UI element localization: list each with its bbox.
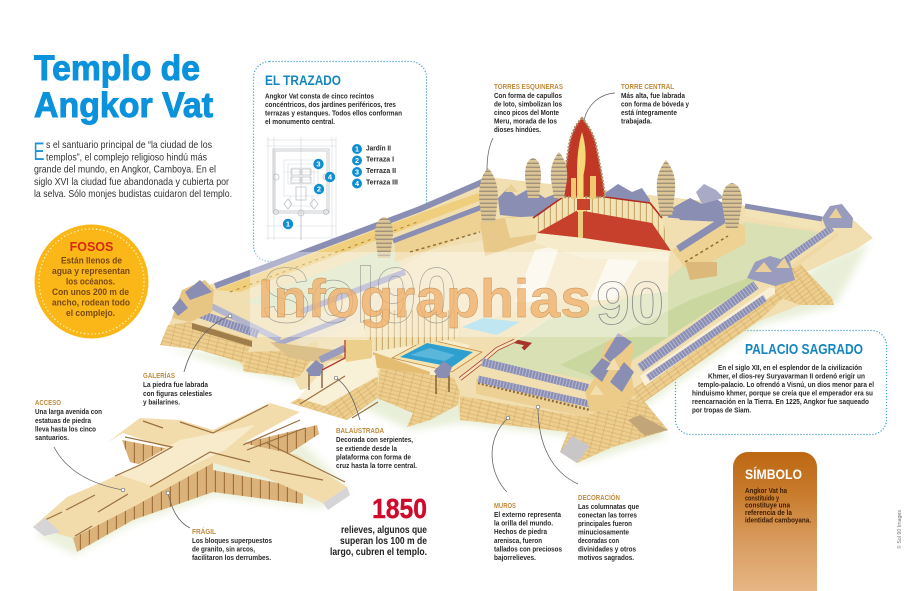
annotation: decoración: decoradas con — [578, 536, 619, 545]
icon: plan marker 3: 3 — [316, 160, 321, 169]
legend: plan keys: 4 — [355, 179, 359, 188]
stat: 1850 relieves — [330, 493, 427, 558]
text: palacio description: hinduismo khmer, porque se creía que el emperador era su — [692, 388, 873, 398]
drop cap: E — [34, 138, 44, 166]
text: fosos description: ancho, rodean todo — [52, 298, 131, 308]
text: palacio description: En el siglo XII, en el esplendor de la civilización — [718, 363, 862, 372]
title — [34, 48, 213, 125]
white stair flanks — [515, 245, 640, 302]
icon: plan marker 1: 1 — [286, 220, 290, 229]
stat: 1850 relieves: largo, cubren el templo. — [330, 547, 427, 558]
causeway balustrade — [300, 376, 378, 418]
heading: palacio sagrado: PALACIO SAGRADO — [745, 341, 863, 358]
front right gallery — [476, 362, 590, 418]
callout: fosos — [34, 224, 148, 338]
annotation: acceso: estatuas de piedra — [35, 416, 92, 425]
annotation: galerías — [143, 314, 232, 406]
right gate pavilion — [747, 256, 795, 286]
text: fosos description: Con unos 200 m de — [52, 287, 129, 297]
cross walls — [73, 505, 133, 552]
annotation: torres esquineras: cinco picos del Monte — [494, 108, 559, 117]
stat: 1850 relieves: superan los 100 m de — [340, 536, 427, 547]
front right corner pavilion — [585, 333, 635, 412]
roof clusters behind the central tower — [498, 180, 730, 238]
corner tower — [479, 168, 498, 222]
legend: plan keys: 2 — [355, 156, 359, 165]
central tower cluster left 1 — [525, 158, 541, 198]
annotation: torres esquineras — [487, 84, 563, 170]
annotation: decoración: divinidades y otros — [578, 544, 636, 554]
annotation: torre central — [584, 84, 690, 126]
watermark: orange name: Infographias — [258, 269, 591, 329]
text: palacio description: por tropas de Siam. — [692, 406, 751, 414]
annotation: acceso: Una larga avenida con — [35, 407, 102, 416]
pond: upper — [462, 318, 520, 335]
outer wall: front left second section — [243, 350, 318, 378]
annotation: torre central: trabajada. — [621, 116, 652, 126]
cutaway colonnade — [533, 197, 670, 250]
cross top surface — [33, 403, 347, 538]
annotation: balaustrada: BALAUSTRADA — [336, 428, 384, 435]
intro text block: siglo XVI la ciudad fue abandonada y cubierta por — [34, 177, 229, 188]
right interior tower — [657, 160, 675, 216]
grass: main field — [480, 222, 818, 382]
annotation: decoración: DECORACIÓN — [578, 493, 620, 502]
illustration: cross terrace — [33, 403, 350, 555]
annotation: decoración: conectan las torres — [578, 510, 637, 520]
interior gallery left middle — [275, 272, 460, 352]
annotation: torres esquineras: TORRES ESQUINERAS — [494, 84, 563, 91]
gazebo left — [306, 340, 345, 390]
panel: el trazado — [254, 62, 426, 262]
annotation: muros: tallados con preciosos — [494, 544, 562, 554]
title: Angkor Vat — [34, 85, 213, 125]
right corner tower — [722, 183, 742, 228]
annotation: balaustrada — [334, 376, 417, 470]
annotation: balaustrada: Decorada con serpientes, — [336, 435, 413, 444]
annotation: frágil: Los bloques superpuestos — [192, 536, 272, 545]
central red path — [460, 318, 548, 379]
intro text block: grande del mundo, en Angkor, Camboya. En el — [34, 164, 216, 176]
annotation: muros: bajorrelieves. — [494, 553, 536, 562]
annotation: muros: El externo representa — [494, 510, 562, 519]
legend: plan keys: Terraza I — [366, 154, 394, 164]
stepped terrace front wall — [333, 330, 470, 380]
outer gallery: back left — [215, 180, 487, 292]
text: símbolo description: Angkor Vat ha — [745, 488, 787, 495]
text: símbolo description: identidad camboyana. — [745, 518, 811, 524]
annotation: frágil — [166, 491, 272, 562]
annotation: acceso: santuarios. — [35, 433, 69, 442]
annotation: torres esquineras: Meru, morada de los — [494, 116, 557, 126]
annotation: decoración: principales fueron — [578, 519, 632, 528]
central tower cluster left 2 — [551, 152, 567, 198]
annotation: acceso: lleva hasta los cinco — [35, 424, 96, 434]
panel: palacio sagrado — [676, 330, 886, 434]
text: palacio description: templo-palacio. Lo ofrendó a Visnú, un dios menor para el — [698, 380, 874, 389]
text: trazado description: Angkor Vat consta de cinco recintos — [265, 92, 374, 100]
text: símbolo description — [745, 488, 811, 524]
front left corner pavilion — [172, 280, 214, 322]
intro text block — [34, 138, 232, 200]
annotation: galerías: GALERÍAS — [143, 371, 175, 380]
heading: el trazado: EL TRAZADO — [265, 73, 341, 88]
legend: plan keys: Jardín II — [366, 144, 391, 152]
legend: plan keys — [352, 144, 398, 188]
annotation: galerías: y bailarines. — [143, 398, 180, 406]
back right pavilion — [822, 204, 853, 228]
outer wall: front right — [460, 396, 590, 432]
annotation: decoración: minuciosamente — [578, 528, 629, 536]
panel: símbolo — [733, 452, 817, 591]
text: palacio description: reencarnación en la Tierra. En 1225, Angkor fue saqueado — [692, 397, 869, 406]
annotation: muros: Hechos de piedra — [494, 527, 548, 536]
central tower — [563, 118, 605, 212]
annotation: galerías: La piedra fue labrada — [143, 380, 209, 389]
stone gate block — [685, 262, 717, 280]
inner gallery left — [393, 207, 538, 262]
illustration: angkor vat temple — [160, 118, 873, 464]
text: trazado description — [265, 92, 402, 126]
temple base platform — [160, 177, 873, 463]
veil over watermark band — [250, 252, 668, 337]
annotation: balaustrada: cruz hasta la torre central. — [336, 461, 417, 470]
stat: 1850 relieves: 1850 — [372, 493, 427, 524]
causeway — [290, 372, 378, 420]
text: palacio description: Khmer, el dios-rey Suryavarman II ordenó erigir un — [708, 372, 865, 380]
central terrace — [310, 230, 670, 352]
annotation: torres esquineras: dioses hindúes. — [494, 125, 541, 134]
text: símbolo description: constituido y — [745, 496, 779, 502]
legend: plan keys: Terraza III — [366, 178, 398, 186]
intro text block: la selva. Sólo monjes budistas cuidaron del templo. — [34, 189, 232, 200]
text: fosos description: los océanos. — [66, 276, 115, 286]
east stair — [323, 487, 350, 510]
pond: lower — [392, 339, 482, 372]
text: símbolo description: referencia de la — [745, 510, 792, 517]
annotation: frágil: facilitaron los derrumbes. — [192, 553, 271, 562]
title: Templo de — [34, 48, 200, 88]
intro text block: s el santuario principal de “la ciudad de los — [46, 140, 212, 151]
central west gate gallery — [270, 340, 372, 362]
annotation: frágil: FRÁGIL — [192, 527, 217, 536]
legend: plan keys: Terraza II — [366, 166, 396, 175]
text: fosos description: el complejo. — [66, 308, 115, 318]
annotation: acceso: ACCESO — [35, 400, 61, 407]
icon: plan marker 4: 4 — [328, 173, 333, 182]
annotation: torre central: Más alta, fue labrada — [621, 91, 686, 100]
annotation: torre central: TORRE CENTRAL — [621, 84, 675, 91]
credit: © Sol 90 Images — [896, 509, 903, 549]
front left gallery — [188, 303, 280, 347]
annotation: torre central: está íntegramente — [621, 108, 677, 117]
watermark: outlined number: 90 — [596, 270, 664, 337]
text: trazado description: el monumento central. — [265, 117, 335, 126]
annotation: muros: la orilla del mundo. — [494, 518, 553, 528]
annotation: balaustrada: se extiende desde la — [336, 444, 398, 453]
right long gallery — [640, 228, 838, 378]
watermark: outlined wordmark: Sol90 — [262, 251, 457, 339]
red pyramid cutaway — [535, 210, 671, 262]
text: símbolo description: constituye una — [745, 502, 790, 510]
cross balustrades — [45, 405, 345, 536]
heading: fosos: FOSOS — [70, 240, 113, 254]
outer wall: front left — [160, 322, 253, 363]
annotation: decoración: motivos sagrados. — [578, 553, 634, 562]
annotation: galerías: con figuras celestiales — [143, 389, 212, 398]
chart: temple floor plan — [266, 137, 336, 240]
outer wall: right side — [632, 285, 790, 405]
legend: plan keys: 1 — [355, 145, 359, 154]
annotation: muros: MUROS — [494, 503, 516, 510]
legend: plan keys: 3 — [355, 168, 359, 177]
gallery right of centre — [668, 214, 745, 268]
text: trazado description: terrazas y estanques. Todos ellos conforman — [265, 108, 402, 118]
front right corner stair foot — [560, 396, 668, 463]
stat: 1850 relieves: relieves, algunos que — [341, 525, 427, 536]
annotation: torres esquineras: de loto, simbolizan los — [494, 100, 562, 108]
left tower — [375, 217, 393, 258]
outer gallery: back right — [745, 205, 822, 230]
text: palacio description — [692, 363, 874, 414]
text: fosos description: agua y representan — [52, 266, 130, 276]
gazebo right — [434, 361, 452, 394]
west stair — [33, 518, 60, 536]
text: trazado description: concéntricos, dos jardines periféricos, tres — [265, 100, 396, 109]
annotation: decoración: Las columnatas que — [578, 502, 639, 511]
text: fosos description — [52, 256, 131, 318]
cross shadow — [36, 440, 350, 555]
shadow under temple — [165, 242, 870, 464]
grass: back left field — [245, 246, 405, 312]
intro text block: templos”, el complejo religioso hindú más — [46, 152, 207, 164]
annotation: muros: arenisca, fueron — [494, 536, 542, 545]
annotation: torres esquineras: Con forma de capullos — [494, 91, 562, 100]
annotation: muros — [492, 416, 562, 562]
annotation: frágil: de granito, sin arcos, — [192, 544, 255, 554]
heading: símbolo: SÍMBOLO — [745, 467, 802, 482]
annotation: decoración — [536, 405, 639, 562]
annotation: acceso — [35, 400, 125, 492]
moat foot right gate — [775, 264, 834, 305]
text: fosos description: Están llenos de — [61, 256, 122, 266]
annotation: torre central: con forma de bóveda y — [621, 100, 690, 108]
annotation: balaustrada: plataforma con forma de — [336, 452, 411, 462]
icon: plan marker 2: 2 — [317, 185, 321, 194]
